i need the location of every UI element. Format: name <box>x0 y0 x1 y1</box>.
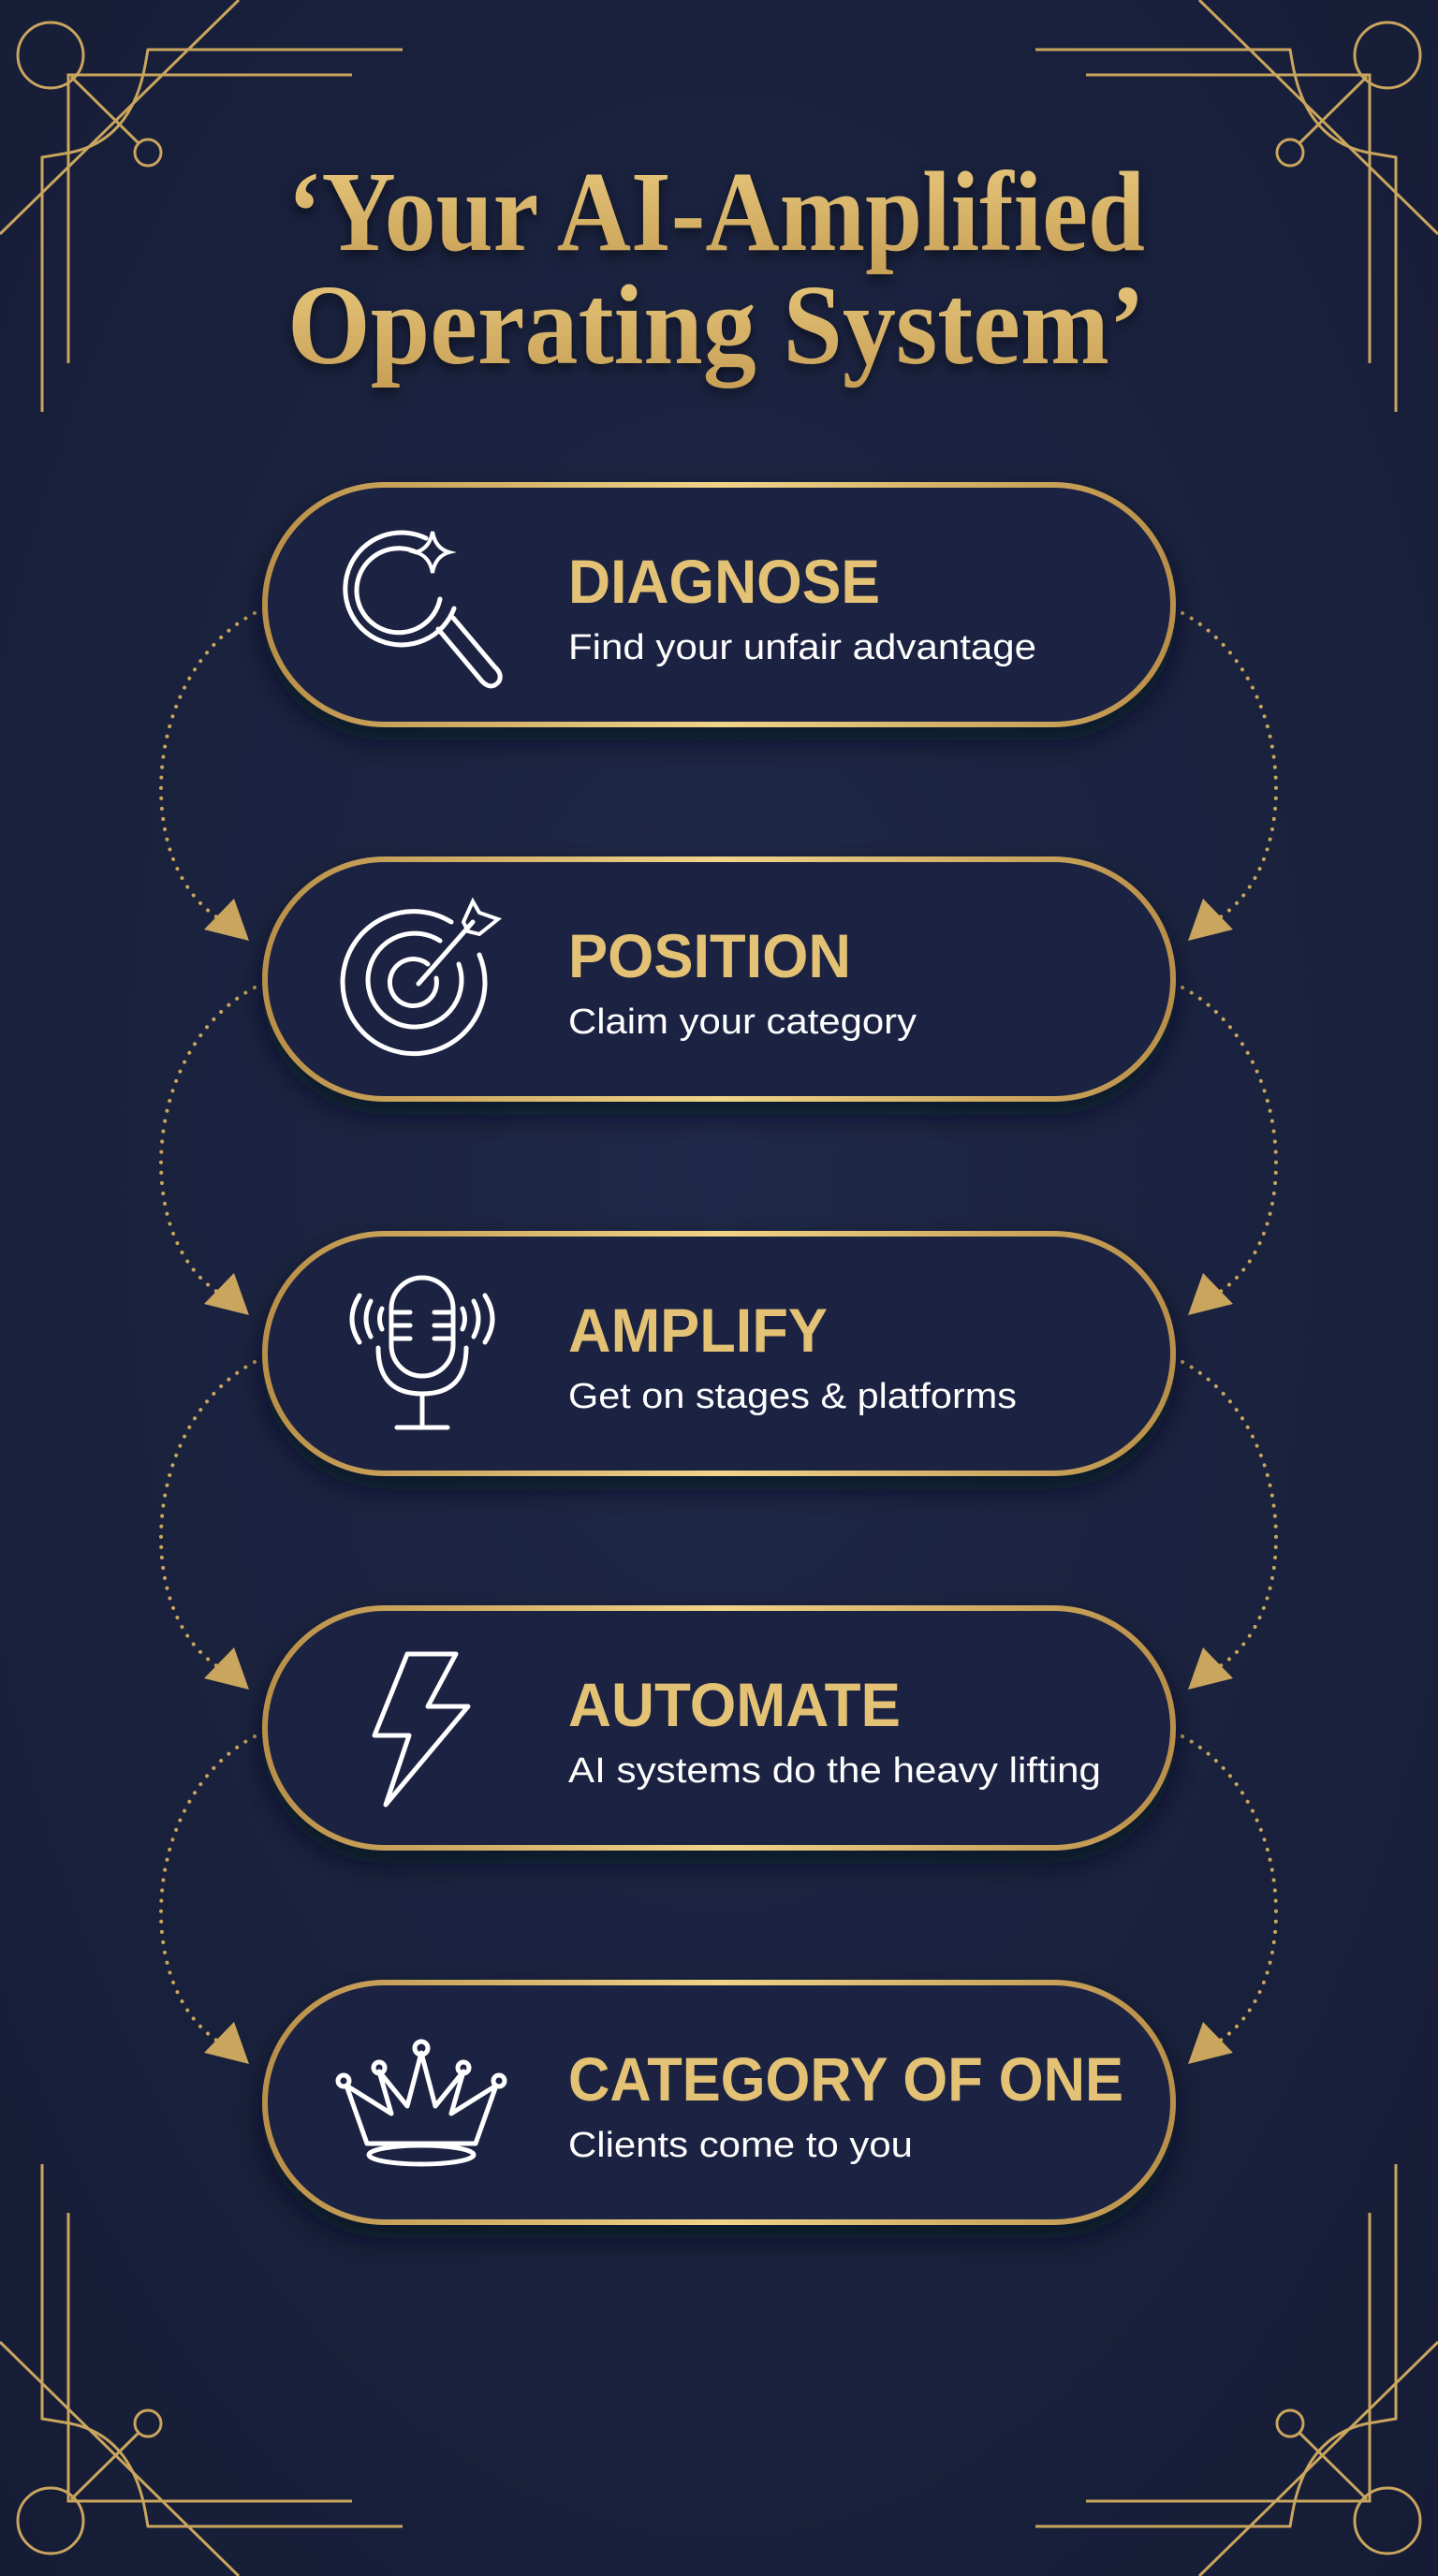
subtitle: Clients come to you <box>568 2126 913 2165</box>
heading: POSITION <box>568 921 851 990</box>
title: ‘Your AI-Amplified <box>287 149 1145 275</box>
corner ornament: bottom-right <box>1035 2164 1438 2576</box>
panel: automate <box>265 1608 1173 1848</box>
panel: diagnose <box>265 485 1173 724</box>
heading: AUTOMATE <box>568 1670 901 1739</box>
icon: magnifier with sparkle <box>345 532 500 686</box>
panel: category of one <box>265 1983 1173 2222</box>
subtitle: Get on stages & platforms <box>568 1377 1017 1416</box>
icon: lightning bolt <box>374 1654 468 1805</box>
icon: target <box>343 901 498 1054</box>
title: Operating System’ <box>287 262 1145 388</box>
icon: crown <box>338 2042 505 2164</box>
subtitle: AI systems do the heavy lifting <box>568 1751 1101 1791</box>
corner ornament: bottom-left <box>0 2164 403 2576</box>
heading: AMPLIFY <box>568 1295 828 1365</box>
corner ornament: top-right <box>1035 0 1438 412</box>
panel: position <box>265 859 1173 1099</box>
subtitle: Claim your category <box>568 1003 917 1042</box>
subtitle: Find your unfair advantage <box>568 628 1036 667</box>
title <box>287 149 1145 388</box>
corner ornament: top-left <box>0 0 403 412</box>
heading: CATEGORY OF ONE <box>568 2044 1123 2114</box>
arrowheads <box>204 899 1233 2064</box>
panel: amplify <box>265 1234 1173 1473</box>
icon: microphone <box>352 1278 492 1427</box>
arrows: dotted connectors <box>161 613 1276 2045</box>
heading: DIAGNOSE <box>568 547 880 616</box>
